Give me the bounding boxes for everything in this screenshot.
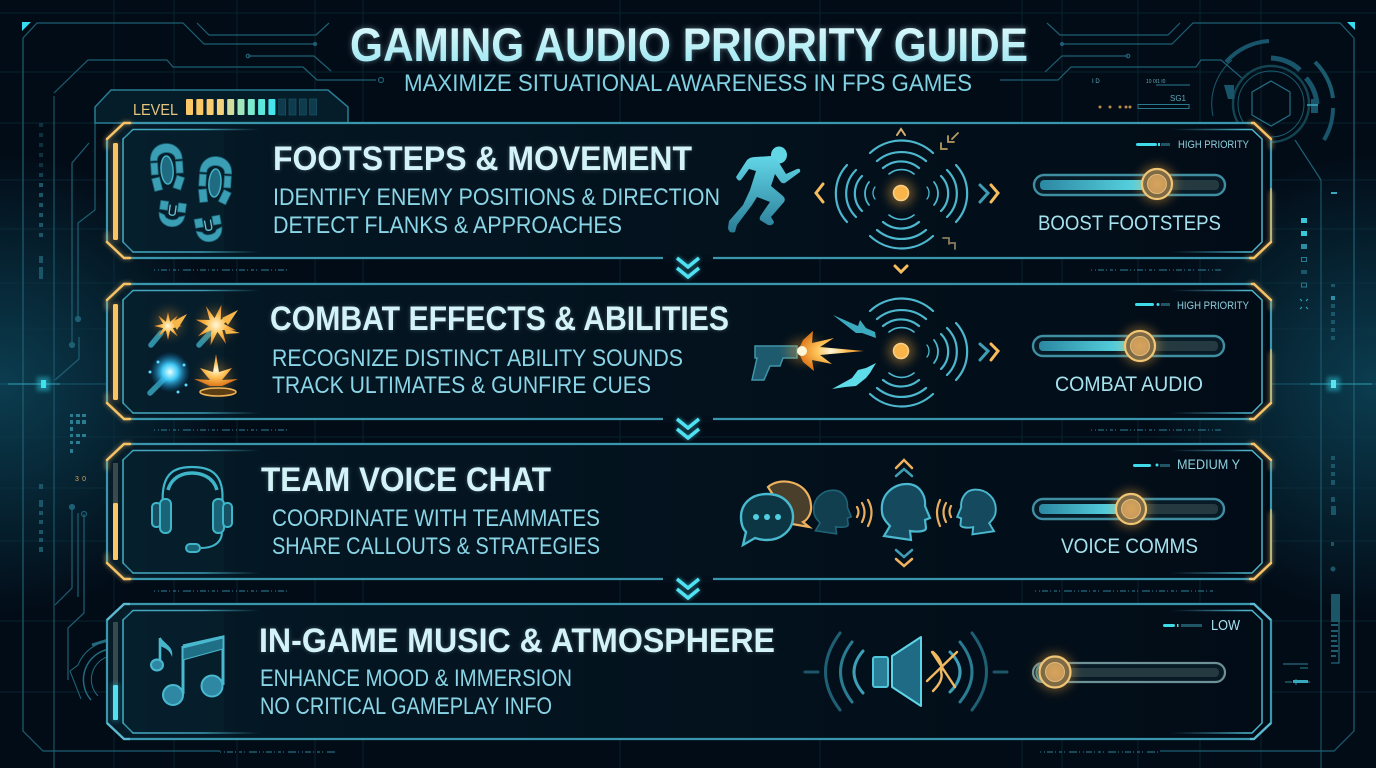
icon: muted speaker (805, 633, 1007, 710)
sound radar (870, 299, 967, 406)
priority tag: HIGH PRIORITY (1178, 139, 1250, 151)
level label: LEVEL (133, 102, 178, 119)
panel: music (107, 604, 1271, 739)
data strips (154, 270, 1223, 752)
description (273, 184, 720, 239)
description: ENHANCE MOOD & IMMERSION (260, 665, 572, 692)
direction arrows (896, 460, 912, 566)
heading: FOOTSTEPS & MOVEMENT (273, 140, 692, 178)
slider label: COMBAT AUDIO (1055, 373, 1203, 396)
description: RECOGNIZE DISTINCT ABILITY SOUNDS (272, 345, 683, 372)
description (272, 505, 600, 560)
priority tag (1163, 617, 1241, 634)
level tab (95, 90, 348, 123)
icon: combat effects (148, 299, 242, 396)
icon: footprints (149, 142, 234, 244)
icon: music notes (151, 637, 223, 705)
priority tag: MEDIUM Y (1177, 456, 1241, 472)
priority tag (1135, 300, 1250, 312)
readout top right: 10 0I1 I0 (1146, 79, 1166, 85)
description: SHARE CALLOUTS & STRATEGIES (272, 533, 600, 560)
icon: headset (152, 467, 232, 552)
panel: footsteps (107, 123, 1271, 277)
icon: gun with muzzle flash (752, 331, 864, 380)
icon: heads talking (814, 484, 996, 540)
icon: speech bubbles (741, 481, 811, 545)
description (260, 665, 572, 720)
description: TRACK ULTIMATES & GUNFIRE CUES (272, 372, 651, 399)
slider (1033, 327, 1224, 365)
description (272, 345, 683, 399)
priority tag (1136, 139, 1250, 151)
small readout left: 3 0 (75, 476, 86, 483)
subtitle: MAXIMIZE SITUATIONAL AWARENESS IN FPS GAMES (404, 70, 972, 97)
direction arrows (816, 129, 998, 272)
slider (1034, 165, 1225, 203)
priority bar (111, 141, 120, 242)
priority bar (111, 302, 120, 402)
slider (1033, 653, 1225, 691)
description: IDENTIFY ENEMY POSITIONS & DIRECTION (273, 184, 720, 211)
slider label: BOOST FOOTSTEPS (1038, 212, 1221, 235)
title: GAMING AUDIO PRIORITY GUIDE (350, 18, 1028, 71)
glow marker right (1310, 377, 1372, 391)
corner markers (22, 22, 1355, 31)
heading: TEAM VOICE CHAT (261, 461, 551, 499)
direction arrows (980, 344, 998, 360)
left side HUD ticks (39, 123, 86, 552)
readout top right (1092, 79, 1190, 108)
panel: combat (107, 284, 1271, 438)
heading: IN-GAME MUSIC & ATMOSPHERE (259, 622, 775, 660)
small HUD bottom left (70, 640, 110, 700)
level meter (186, 99, 317, 115)
heading: COMBAT EFFECTS & ABILITIES (270, 300, 729, 338)
readout top right: I D (1092, 79, 1100, 85)
readout top right: SG1 (1170, 94, 1187, 103)
panel: voice chat (107, 444, 1271, 598)
priority tag: HIGH PRIORITY (1177, 300, 1250, 312)
description: COORDINATE WITH TEAMMATES (272, 505, 600, 532)
priority tag (1133, 456, 1241, 472)
priority bar (111, 622, 120, 722)
icon: bullet wisps (832, 315, 876, 389)
readout bottom right (1283, 664, 1310, 685)
priority bar (113, 463, 118, 560)
right side HUD ticks (1300, 192, 1340, 663)
glow marker left (8, 377, 60, 391)
HUD reticle top right (1212, 41, 1333, 142)
slider (1033, 490, 1224, 528)
description: NO CRITICAL GAMEPLAY INFO (260, 693, 552, 720)
priority tag: LOW (1211, 617, 1241, 634)
description: DETECT FLANKS & APPROACHES (273, 212, 622, 239)
icon: runner (728, 146, 800, 232)
slider label: VOICE COMMS (1061, 535, 1198, 558)
sound radar (836, 141, 967, 248)
